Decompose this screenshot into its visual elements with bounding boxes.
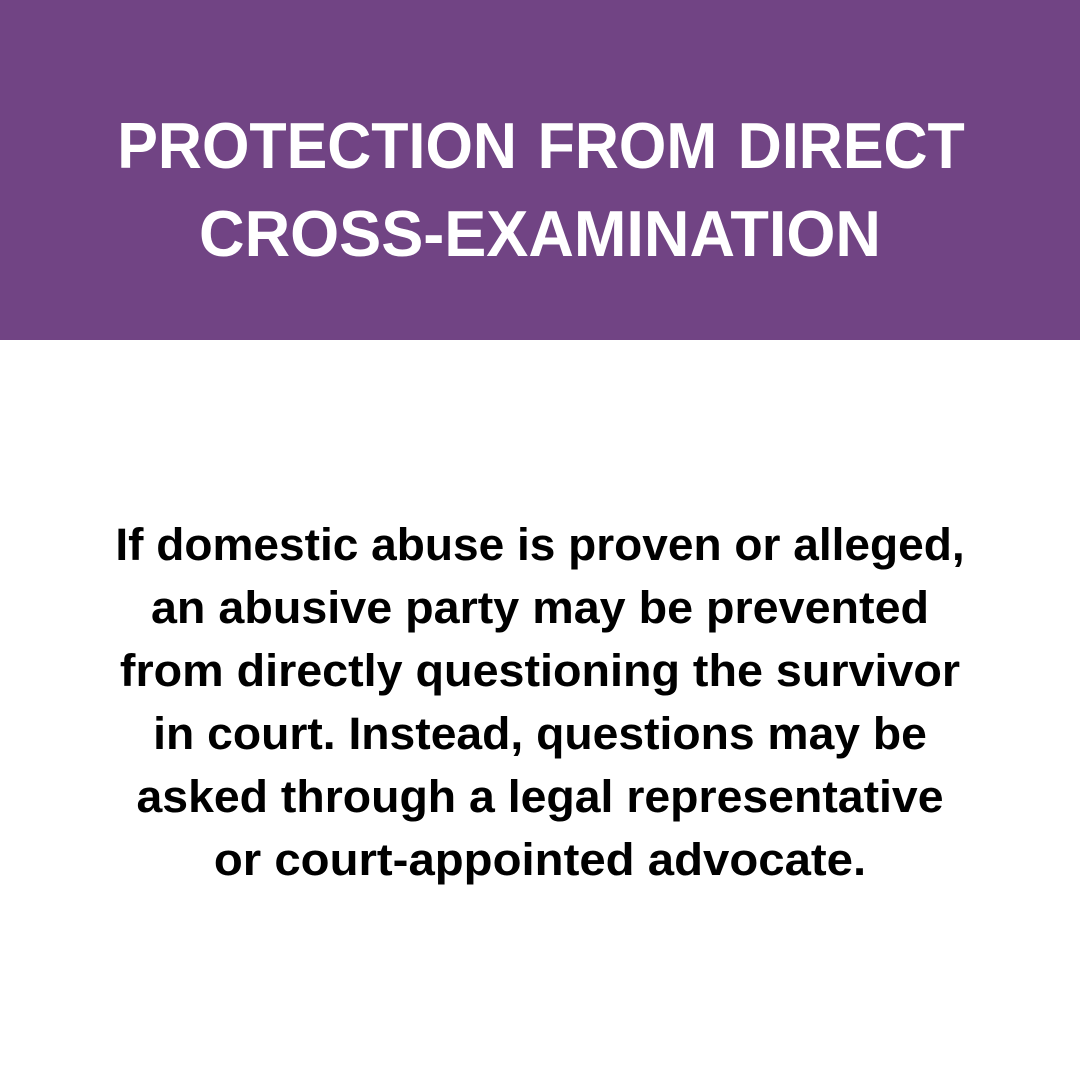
title bbox=[117, 109, 965, 270]
body text block: If domestic abuse is proven or alleged, bbox=[115, 519, 965, 570]
title: PROTECTION FROM DIRECT bbox=[117, 109, 965, 182]
body text block: in court. Instead, questions may be bbox=[153, 708, 927, 759]
header banner bbox=[0, 0, 1080, 340]
body text block: or court-appointed advocate. bbox=[214, 834, 866, 885]
body text block bbox=[115, 519, 965, 885]
title: CROSS-EXAMINATION bbox=[199, 197, 881, 270]
body text block: an abusive party may be prevented bbox=[151, 582, 929, 633]
body text block: asked through a legal representative bbox=[136, 771, 944, 822]
body text block: from directly questioning the survivor bbox=[120, 645, 960, 696]
